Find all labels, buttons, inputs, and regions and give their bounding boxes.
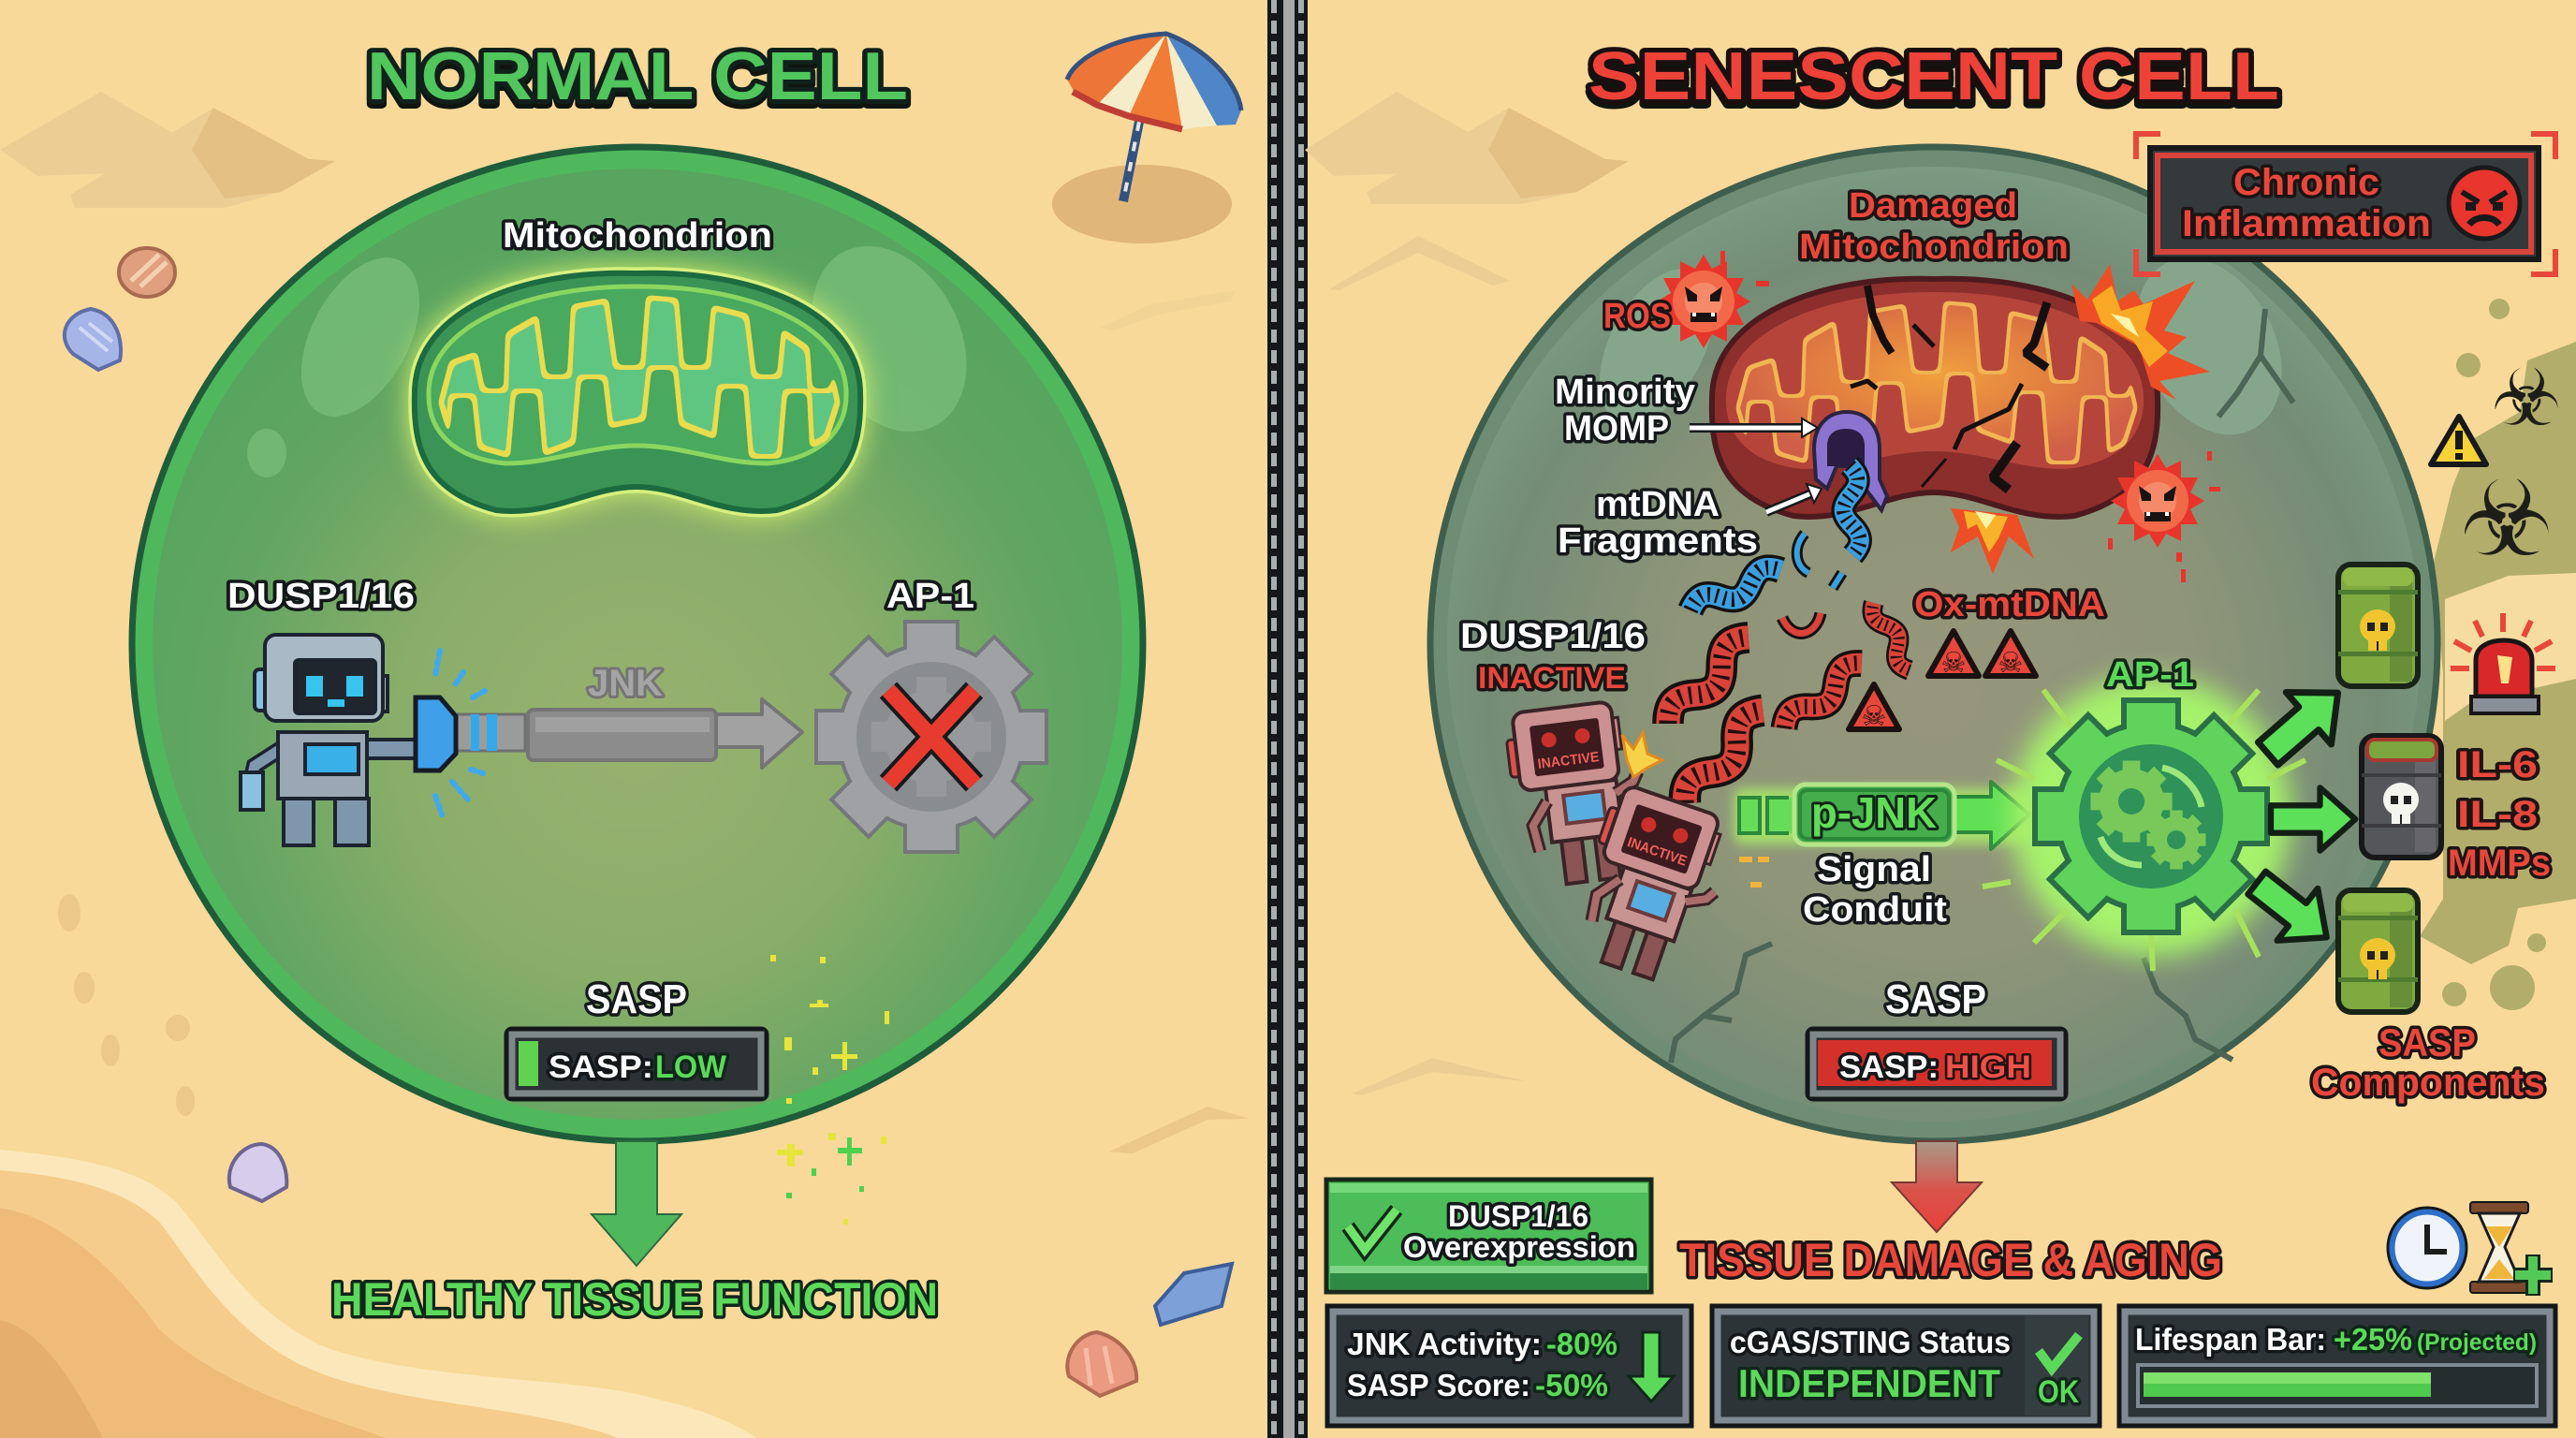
icon: biohazard small: ☣ <box>2491 352 2562 444</box>
explosion: bottom <box>1951 508 2034 574</box>
icon: inactive robot 2 <box>1561 782 1738 990</box>
badge: DUSP1/16 overexpression: DUSP1/16 <box>1448 1199 1588 1233</box>
panel: cGAS/STING status: INDEPENDENT <box>1738 1361 2000 1405</box>
label: damaged mitochondrion <box>1799 186 2069 267</box>
icon: blue shell <box>65 309 121 370</box>
ROS debris <box>1720 251 2220 582</box>
label: signal conduit: Conduit <box>1803 890 1947 930</box>
label: SASP components: SASP <box>2378 1020 2476 1064</box>
badge: DUSP1/16 overexpression <box>1326 1180 1651 1292</box>
label: AP-1: AP-1 <box>2106 655 2194 695</box>
divider <box>1267 0 1308 1438</box>
panel: lifespan bar <box>2119 1306 2555 1426</box>
cell membrane <box>132 147 1143 1141</box>
arrow: down to healthy tissue <box>592 1141 681 1266</box>
explosion: upper right <box>2071 264 2210 400</box>
label: IL-8: IL-8 <box>2457 794 2538 835</box>
status box: SASP low <box>506 1029 767 1099</box>
arrow: down to tissue damage <box>1892 1141 1982 1232</box>
icon: clock <box>2388 1208 2466 1288</box>
icon: inactive robot 2: INACTIVE <box>1625 834 1689 870</box>
icon: robot DUSP1/16 <box>241 635 418 845</box>
arrow: to barrel bottom <box>2236 857 2347 963</box>
cell membrane <box>1430 147 2437 1141</box>
icon: ROS burst 1 <box>1657 255 1750 348</box>
label: mtDNA fragments: Fragments <box>1558 521 1758 561</box>
label: AP-1: AP-1 <box>886 577 974 616</box>
DNA blue fragments <box>1687 465 1861 618</box>
icon: ROS burst 2 <box>2111 454 2204 548</box>
icon: inactive robot 1 <box>1503 699 1650 889</box>
progress bar <box>2138 1365 2537 1406</box>
status box: SASP high: SASP: <box>1839 1049 1939 1085</box>
label: DUSP1/16: DUSP1/16 <box>227 577 415 616</box>
label: signal conduit <box>1803 850 1947 930</box>
label: mitochondrion: Mitochondrion <box>503 216 772 256</box>
outcome: tissue damage and aging: TISSUE DAMAGE & AGING <box>1679 1234 2222 1286</box>
label: minority MOMP: MOMP <box>1564 409 1669 448</box>
sand shore <box>0 1150 756 1438</box>
icon: angry face <box>2449 168 2520 239</box>
title: senescent cell: SENESCENT CELL <box>1588 39 2279 114</box>
panel: JNK and SASP metrics: SASP Score: <box>1347 1368 1530 1402</box>
title: normal cell: NORMAL CELL <box>367 39 908 114</box>
toxic stain <box>2420 299 2576 1010</box>
label: p-JNK: p-JNK <box>1811 788 1937 837</box>
DNA red ox-mtDNA <box>1661 600 1915 810</box>
label: damaged mitochondrion: Damaged <box>1849 186 2017 226</box>
icon: gear AP-1 active <box>1983 676 2305 971</box>
label: ox-mtDNA: Ox-mtDNA <box>1914 585 2105 624</box>
panel: cGAS/STING status <box>1712 1306 2100 1426</box>
damaged mitochondrion <box>1712 279 2158 517</box>
icon: down arrow <box>1629 1332 1674 1401</box>
icon: checkmark <box>1348 1210 1397 1250</box>
label: inactive: INACTIVE <box>1478 661 1626 695</box>
label: JNK: JNK <box>588 663 663 704</box>
icon: barrel middle <box>2362 736 2441 858</box>
panel: JNK and SASP metrics <box>1327 1306 1691 1426</box>
status box: SASP high: HIGH <box>1945 1049 2031 1085</box>
icon: gear AP-1 inactive <box>818 624 1045 850</box>
conduit: JNK <box>416 697 802 770</box>
label: SASP: SASP <box>1885 976 1986 1022</box>
decorative footprints and sand streak <box>58 894 1250 1153</box>
arrow: to barrel middle <box>2271 787 2355 851</box>
panel: lifespan bar: +25% <box>2334 1322 2412 1357</box>
panel: cGAS/STING status: OK <box>2038 1374 2079 1410</box>
status box: SASP high <box>1808 1029 2066 1099</box>
icon: biohazard large: ☣ <box>2460 459 2554 580</box>
cell highlights <box>247 219 998 477</box>
panel: senescent cell <box>1430 147 2551 1141</box>
label: MMPs: MMPs <box>2448 843 2551 884</box>
icon: warning triangle <box>2431 417 2486 464</box>
status box: SASP low: LOW <box>655 1049 727 1085</box>
label: minority MOMP: Minority <box>1555 373 1695 412</box>
icon: blue conch <box>1155 1264 1232 1325</box>
callout: chronic inflammation <box>2136 134 2555 274</box>
mitochondrion <box>415 273 860 511</box>
icon: coral shell <box>1067 1332 1136 1396</box>
label: mtDNA fragments: mtDNA <box>1596 485 1720 524</box>
panel: cGAS/STING status: cGAS/STING Status <box>1730 1325 2011 1359</box>
dunes: left panel <box>0 92 1236 330</box>
panel: JNK and SASP metrics: JNK Activity: <box>1347 1327 1542 1361</box>
label: SASP components <box>2311 1020 2545 1104</box>
label: minority MOMP <box>1555 373 1695 448</box>
cell highlights and cracks <box>1576 233 2311 1063</box>
label: SASP components: Components <box>2311 1060 2545 1104</box>
sparkles <box>770 955 889 1225</box>
label: signal conduit: Signal <box>1817 850 1931 889</box>
label: mtDNA fragments <box>1558 485 1758 561</box>
icon: peach shell <box>119 248 175 297</box>
panel: JNK and SASP metrics: -80% <box>1546 1327 1617 1361</box>
label: damaged mitochondrion: Mitochondrion <box>1799 227 2069 267</box>
icon: beach umbrella <box>1052 34 1241 243</box>
sand patch behind siren <box>2445 573 2576 721</box>
dunes: right panel <box>1305 92 1629 1095</box>
arrow: to barrel top <box>2246 667 2361 780</box>
panel: normal cell <box>132 147 1143 1225</box>
label: DUSP1/16: DUSP1/16 <box>1460 617 1646 656</box>
label: ROS: ROS <box>1603 297 1671 336</box>
icon: lavender shell <box>229 1144 286 1201</box>
badge: DUSP1/16 overexpression: Overexpression <box>1403 1230 1635 1264</box>
icon: skull warning triangles <box>1849 631 2036 733</box>
callout: chronic inflammation: Inflammation <box>2182 203 2431 244</box>
conduit: p-JNK <box>1734 782 2033 849</box>
panel: lifespan bar: Lifespan Bar: <box>2135 1322 2326 1357</box>
label: SASP: SASP <box>586 976 687 1022</box>
icon: OK check <box>2039 1335 2079 1369</box>
icon: inactive robot 1: INACTIVE <box>1537 749 1600 772</box>
panel: lifespan bar: (Projected) <box>2417 1329 2537 1356</box>
callout: chronic inflammation: Chronic <box>2233 162 2379 203</box>
arrow: MOMP <box>1690 418 1818 437</box>
icon: hourglass with plus <box>2470 1202 2553 1296</box>
icon: barrel top <box>2338 565 2418 686</box>
icon: alarm siren <box>2451 613 2555 713</box>
arrow: mtDNA <box>1766 484 1822 512</box>
icon: barrel bottom <box>2338 890 2418 1012</box>
MOMP pore <box>1814 412 1887 510</box>
outcome: healthy tissue function: HEALTHY TISSUE FUNCTION <box>331 1273 938 1326</box>
sparks <box>1739 857 1769 888</box>
water sparks <box>435 651 485 814</box>
label: IL-6: IL-6 <box>2457 744 2538 785</box>
panel: JNK and SASP metrics: -50% <box>1535 1368 1608 1402</box>
status box: SASP low: SASP: <box>549 1049 653 1085</box>
icon: spark from robot <box>1622 732 1662 777</box>
